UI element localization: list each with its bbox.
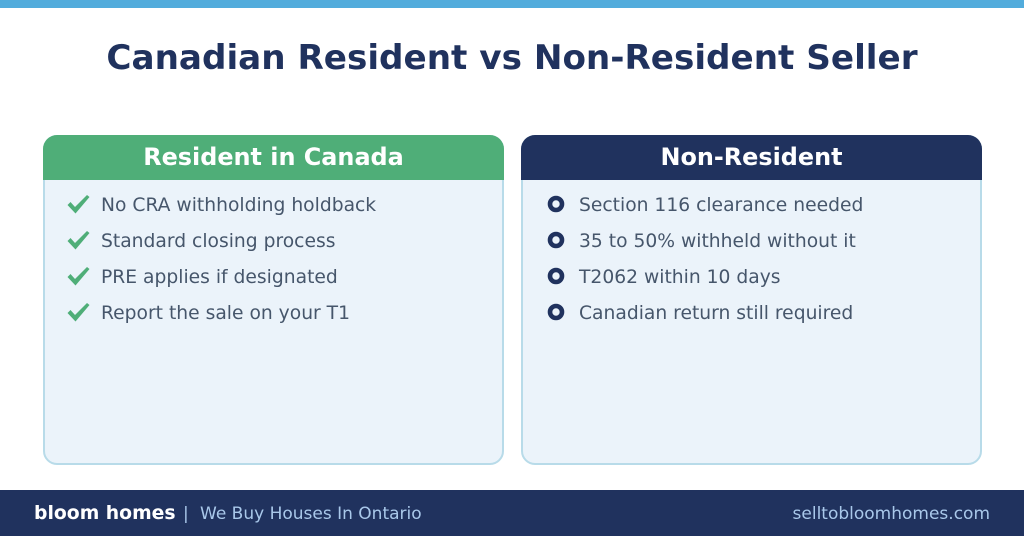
item text: Canadian return still required bbox=[579, 303, 853, 324]
item text: T2062 within 10 days bbox=[579, 267, 781, 288]
ring item 2 bbox=[548, 231, 856, 252]
footer divider: | bbox=[183, 504, 189, 524]
icon: ring bbox=[548, 304, 564, 320]
icon: check bbox=[68, 231, 90, 250]
item text: Standard closing process bbox=[101, 231, 335, 252]
icon: check bbox=[68, 267, 90, 286]
icon: ring bbox=[548, 268, 564, 284]
footer bar bbox=[0, 490, 1024, 536]
item text: Report the sale on your T1 bbox=[101, 303, 350, 324]
item text: PRE applies if designated bbox=[101, 267, 338, 288]
icon: check bbox=[68, 195, 90, 214]
panel heading: resident: Resident in Canada bbox=[143, 143, 404, 171]
icon: ring bbox=[548, 232, 564, 248]
footer brand: bloom homes bbox=[34, 503, 176, 524]
top accent bar bbox=[0, 0, 1024, 8]
panel heading: non-resident bbox=[521, 135, 982, 180]
check item 2 bbox=[68, 231, 335, 252]
panel: resident in Canada bbox=[43, 135, 504, 465]
icon: ring bbox=[548, 196, 564, 212]
icon: check bbox=[68, 303, 90, 322]
footer tagline: We Buy Houses In Ontario bbox=[200, 504, 422, 524]
panel heading: non-resident: Non-Resident bbox=[660, 143, 843, 171]
panel: non-resident bbox=[521, 135, 982, 465]
ring item 1 bbox=[548, 195, 863, 216]
ring item 4 bbox=[548, 303, 853, 324]
ring item 3 bbox=[548, 267, 781, 288]
item text: 35 to 50% withheld without it bbox=[579, 231, 856, 252]
check item 4 bbox=[68, 303, 350, 324]
title: Canadian Resident vs Non-Resident Seller bbox=[106, 38, 918, 78]
item text: No CRA withholding holdback bbox=[101, 195, 376, 216]
check item 1 bbox=[68, 195, 376, 216]
footer website: selltobloomhomes.com bbox=[793, 504, 990, 524]
item text: Section 116 clearance needed bbox=[579, 195, 863, 216]
panel heading: resident bbox=[43, 135, 504, 180]
check item 3 bbox=[68, 267, 338, 288]
